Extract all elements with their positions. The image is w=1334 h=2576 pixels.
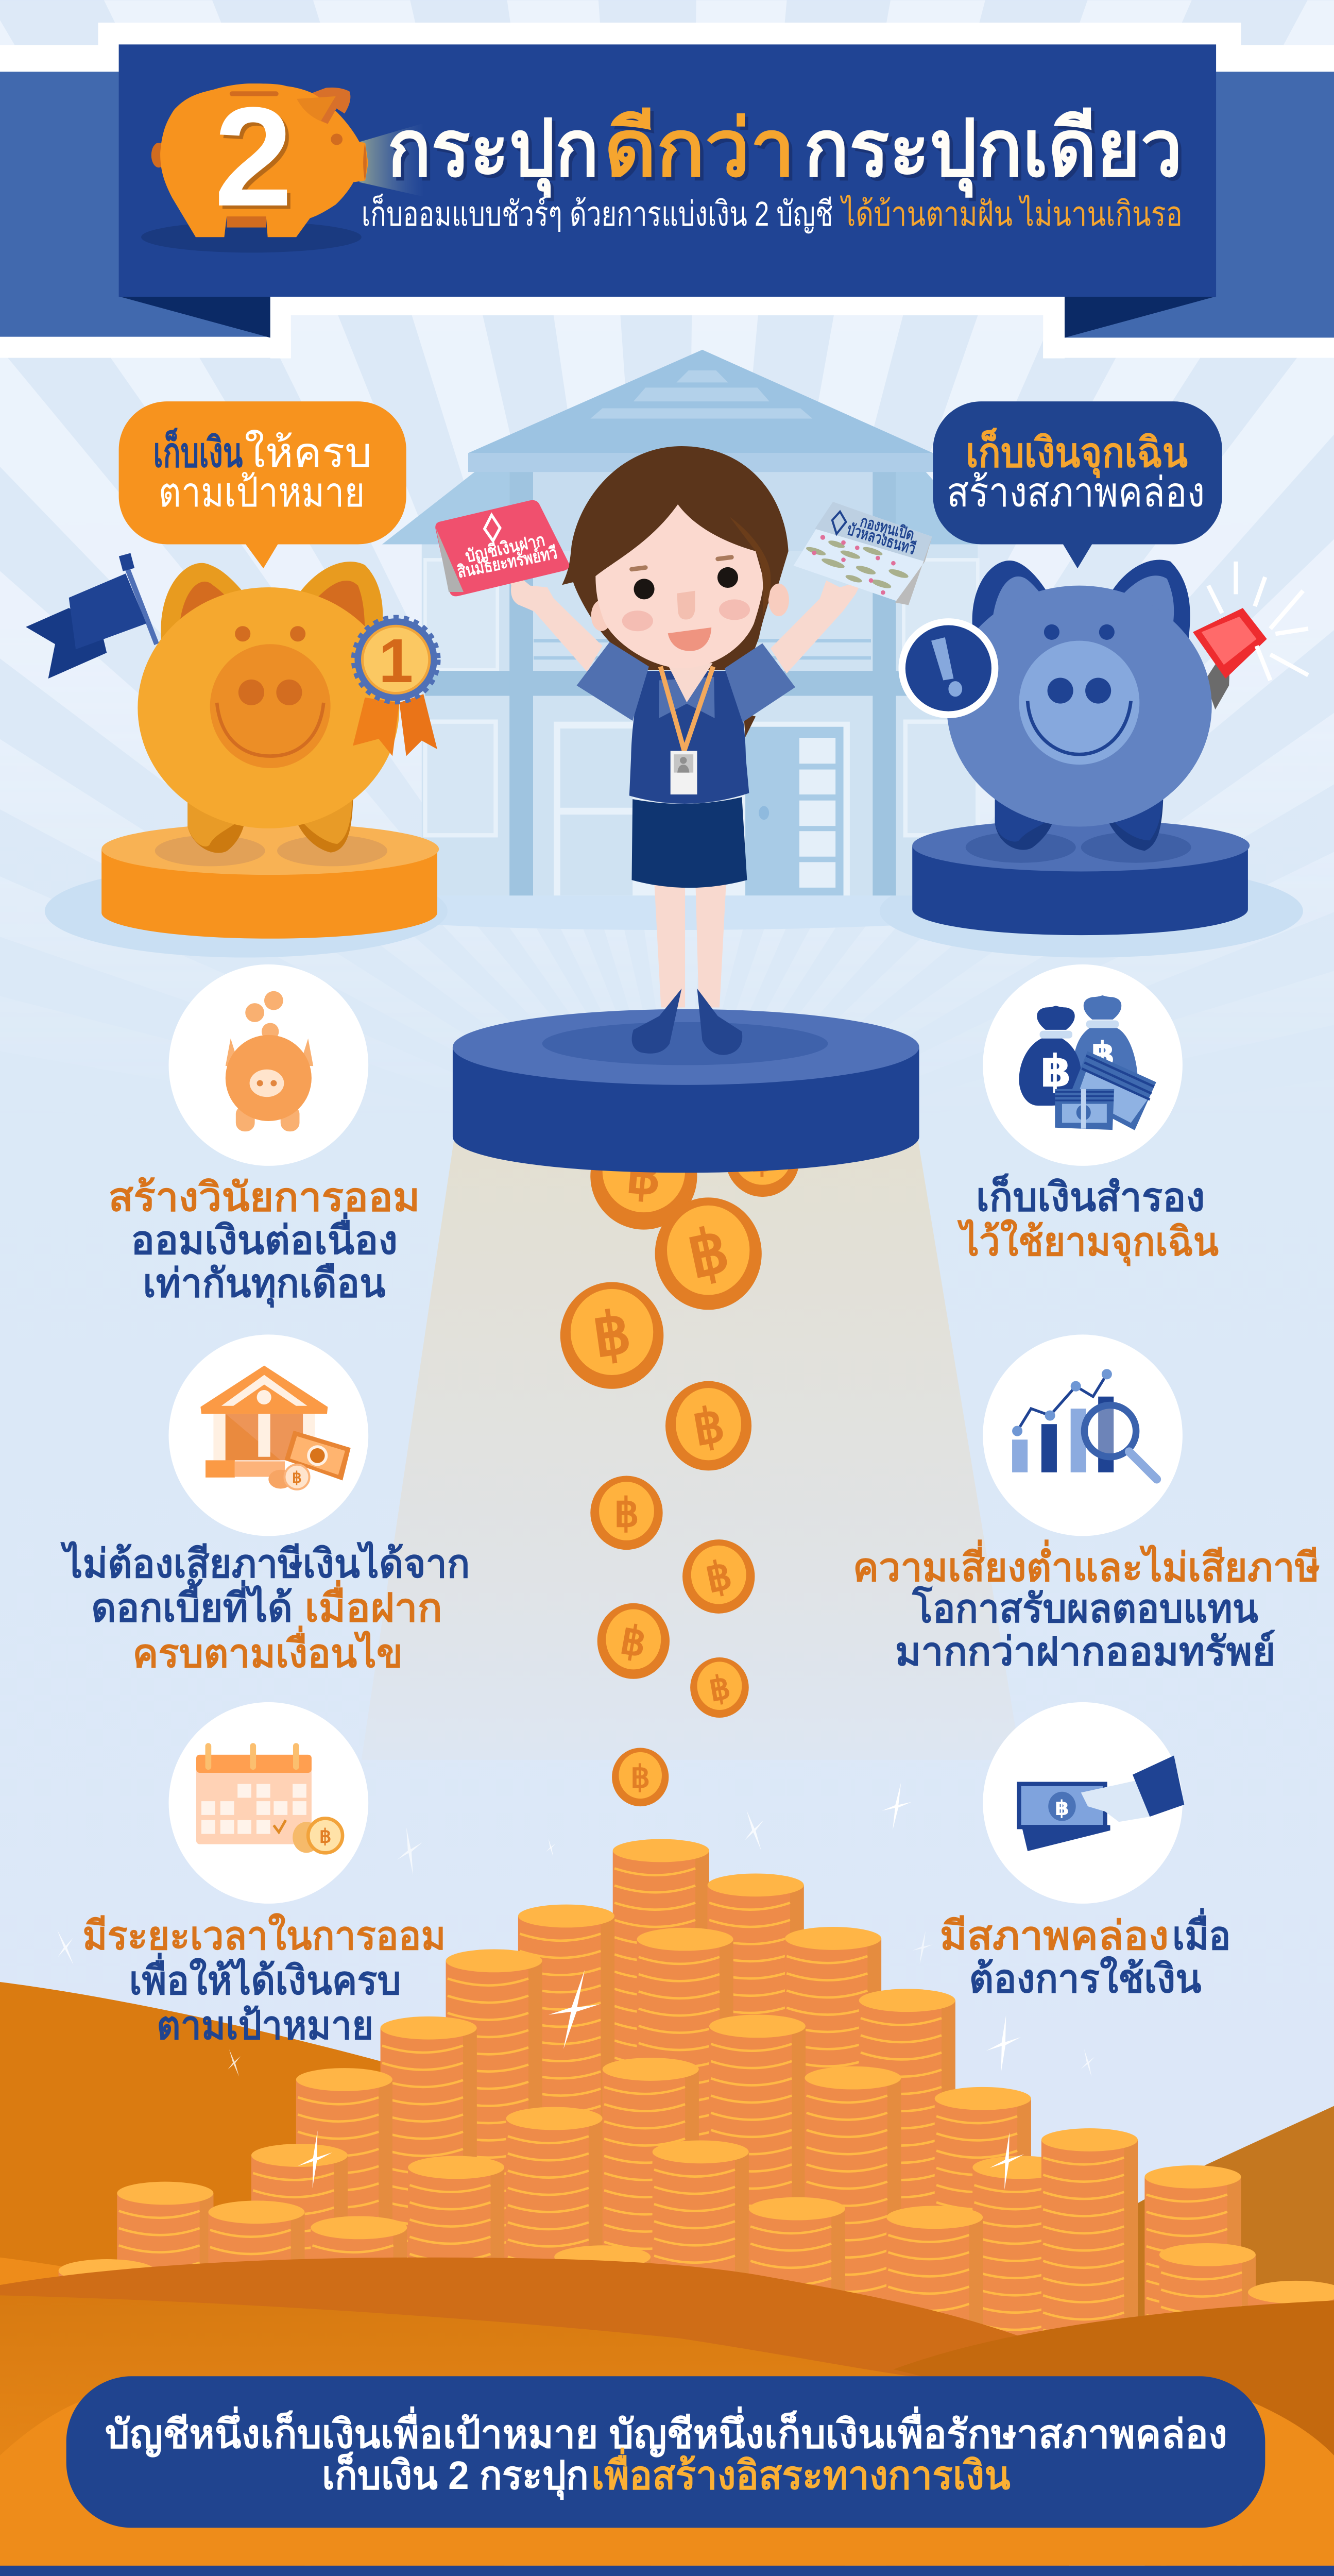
icon: bank and banknote: ฿ (292, 1469, 302, 1486)
hair highlight (729, 517, 771, 617)
conclusion callout: เก็บเงิน 2 กระปุก (322, 2452, 589, 2500)
panel: tax free: ครบตามเงื่อนไข (132, 1625, 403, 1675)
left orange platform (101, 823, 439, 939)
panel: discipline: ออมเงินต่อเนื่อง (131, 1212, 398, 1262)
book: mutual fund: บัวหลวงธนทวี (845, 520, 918, 558)
back bag (1073, 1028, 1138, 1087)
panel: tax free: ไม่ต้องเสียภาษีเงินได้จาก (60, 1541, 470, 1586)
nose (677, 591, 695, 620)
title: กระปุกเดียว (804, 104, 1183, 198)
front bag (1019, 1039, 1081, 1106)
panel: emergency reserve (957, 964, 1219, 1267)
orange piggy bank: saving goal (138, 562, 399, 853)
falling baht coins: ฿ (706, 1669, 733, 1708)
collar (659, 677, 715, 718)
subtitle: ได้บ้านตามฝัน ไม่นานเกินรอ (840, 194, 1183, 233)
ear back (312, 88, 350, 113)
front hills (0, 2258, 1334, 2566)
upper windows (425, 560, 978, 670)
icon: money bags: ฿ (1040, 1046, 1071, 1096)
ears (591, 600, 612, 631)
icon: calendar with coins (169, 1702, 368, 1904)
falling baht coins (560, 1121, 799, 1806)
panel: tax free: ดอกเบี้ยที่ได้ (91, 1579, 293, 1630)
speech bubble: left (119, 401, 406, 568)
rotated banknote bundle (1069, 1051, 1156, 1130)
title: กระปุก (387, 104, 599, 198)
icon: hand giving banknote (983, 1702, 1184, 1904)
footer bar (0, 2566, 1334, 2576)
icon: bar chart and magnifier (983, 1334, 1183, 1536)
panel: tax free (60, 1334, 470, 1675)
icon: small piggy bank (169, 964, 368, 1166)
falling baht coins: ฿ (750, 1137, 775, 1179)
book: mutual fund (794, 502, 932, 605)
name badge (671, 751, 697, 794)
panel: low risk (853, 1334, 1320, 1674)
book: mutual fund: กองทุนเปิด (858, 512, 916, 545)
icon: hand giving banknote: ฿ (1055, 1797, 1069, 1820)
panel: liquidity: มีสภาพคล่อง (940, 1913, 1169, 1958)
icon: alert exclamation (898, 618, 998, 718)
speech bubble: right (933, 401, 1222, 568)
shoes (632, 989, 742, 1055)
icon: header piggy bank: 2 (214, 78, 293, 236)
sleeves (577, 642, 795, 722)
panel: discipline: สร้างวินัยการออม (109, 1175, 420, 1219)
shirt (629, 671, 749, 804)
face (595, 504, 763, 668)
falling baht coins: ฿ (617, 1617, 649, 1666)
falling baht coins: ฿ (589, 1299, 635, 1369)
conclusion callout (66, 2376, 1265, 2528)
skirt (631, 797, 747, 888)
ribbon folds (119, 296, 270, 337)
panel: time frame: มีระยะเวลาในการออม (82, 1912, 446, 1958)
panel: emergency reserve: ไว้ใช้ยามจุกเฉิน (957, 1218, 1219, 1267)
banner (119, 44, 1216, 297)
falling coins light beam (362, 1137, 1021, 1760)
speech bubble: right: สร้างสภาพคล่อง (947, 469, 1205, 515)
legs (654, 878, 726, 1007)
bank logo on book (485, 515, 500, 541)
fund logo (832, 512, 846, 534)
top header band (0, 23, 1334, 359)
sparkles (47, 1780, 1100, 2191)
eyes (634, 567, 738, 599)
icon: bank and banknote (169, 1334, 368, 1536)
falling baht coins: ฿ (614, 1491, 639, 1535)
speech bubble: left: ให้ครบ (245, 429, 372, 476)
falling baht coins: ฿ (630, 1759, 650, 1794)
right arm and hand (771, 581, 862, 673)
lower windows (425, 722, 978, 835)
background sun rays (0, 0, 1334, 859)
woman holding two account books (508, 446, 862, 1055)
balcony (534, 641, 871, 658)
coin stacks (59, 1839, 1334, 2576)
book: savings account: บัญชีเงินฝาก (464, 530, 547, 566)
panel: low risk: โอกาสรับผลตอบแทน (912, 1585, 1258, 1631)
neck (667, 663, 713, 702)
hair back (562, 446, 789, 670)
blue piggy bank: emergency savings (947, 560, 1230, 851)
title (387, 104, 1183, 198)
speech bubble: left: เก็บเงิน (153, 428, 243, 476)
panel: time frame (82, 1702, 446, 2047)
icon: money bags: ฿ (1091, 1036, 1115, 1074)
falling baht coins: ฿ (624, 1142, 664, 1207)
panel: liquidity: ต้องการใช้เงิน (969, 1955, 1202, 2001)
falling baht coins: ฿ (689, 1397, 728, 1455)
title: ดีกว่า (604, 104, 795, 193)
panel: discipline (109, 964, 420, 1308)
speech bubble: right: เก็บเงินจุกเฉิน (966, 428, 1188, 479)
icon: calendar with coins: ฿ (319, 1825, 331, 1846)
panel: tax free: เมื่อฝาก (305, 1580, 442, 1630)
book: savings account: สินมัธยะทรัพย์ทวี (455, 543, 559, 582)
panel: time frame: ตามเป้าหมาย (157, 2003, 373, 2047)
falling baht coins: ฿ (682, 1215, 734, 1291)
icon: header piggy bank (141, 78, 424, 252)
book: savings account (435, 500, 569, 596)
panel: low risk: ความเสี่ยงต่ำและไม่เสียภาษี (853, 1539, 1320, 1589)
lanyard (660, 667, 713, 751)
panel: discipline: เท่ากันทุกเดือน (143, 1261, 386, 1308)
subtitle: เก็บออมแบบชัวร์ๆ ด้วยการแบ่งเงิน 2 บัญชี (362, 194, 833, 233)
left arm and hand (508, 575, 603, 672)
cheeks (622, 599, 750, 631)
conclusion callout: เพื่อสร้างอิสระทางการเงิน (591, 2447, 1011, 2498)
panel: low risk: มากกว่าฝากออมทรัพย์ (895, 1630, 1275, 1674)
icon: red alarm light (1193, 562, 1308, 680)
speech bubble: left: ตามเป้าหมาย (158, 469, 365, 515)
icon: number one medal (353, 618, 438, 756)
right blue platform (912, 820, 1250, 935)
central stage (453, 1009, 919, 1173)
lotus pattern (805, 539, 909, 590)
ear front (297, 96, 336, 124)
falling baht coins: ฿ (702, 1553, 736, 1601)
house illustration (382, 350, 990, 895)
panel: time frame: เพื่อให้ได้เงินครบ (129, 1952, 401, 2003)
panel: emergency reserve: เก็บเงินสำรอง (976, 1174, 1205, 1219)
icon: goal flag (26, 553, 157, 679)
mouth (668, 628, 711, 651)
front banknote bundle (1055, 1089, 1114, 1130)
eyebrows (631, 557, 731, 569)
icon: money bags (983, 964, 1183, 1166)
conclusion callout: บัญชีหนึ่งเก็บเงินเพื่อเป้าหมาย บัญชีหนึ่งเก็บเงินเพื่อรักษาสภาพคล่อง (105, 2406, 1227, 2458)
icon: number one medal: 1 (379, 626, 413, 696)
panel: liquidity (940, 1702, 1230, 2001)
panel: liquidity: เมื่อ (1172, 1907, 1230, 1958)
back hills (0, 1982, 1334, 2576)
ground shadows (45, 861, 1303, 958)
